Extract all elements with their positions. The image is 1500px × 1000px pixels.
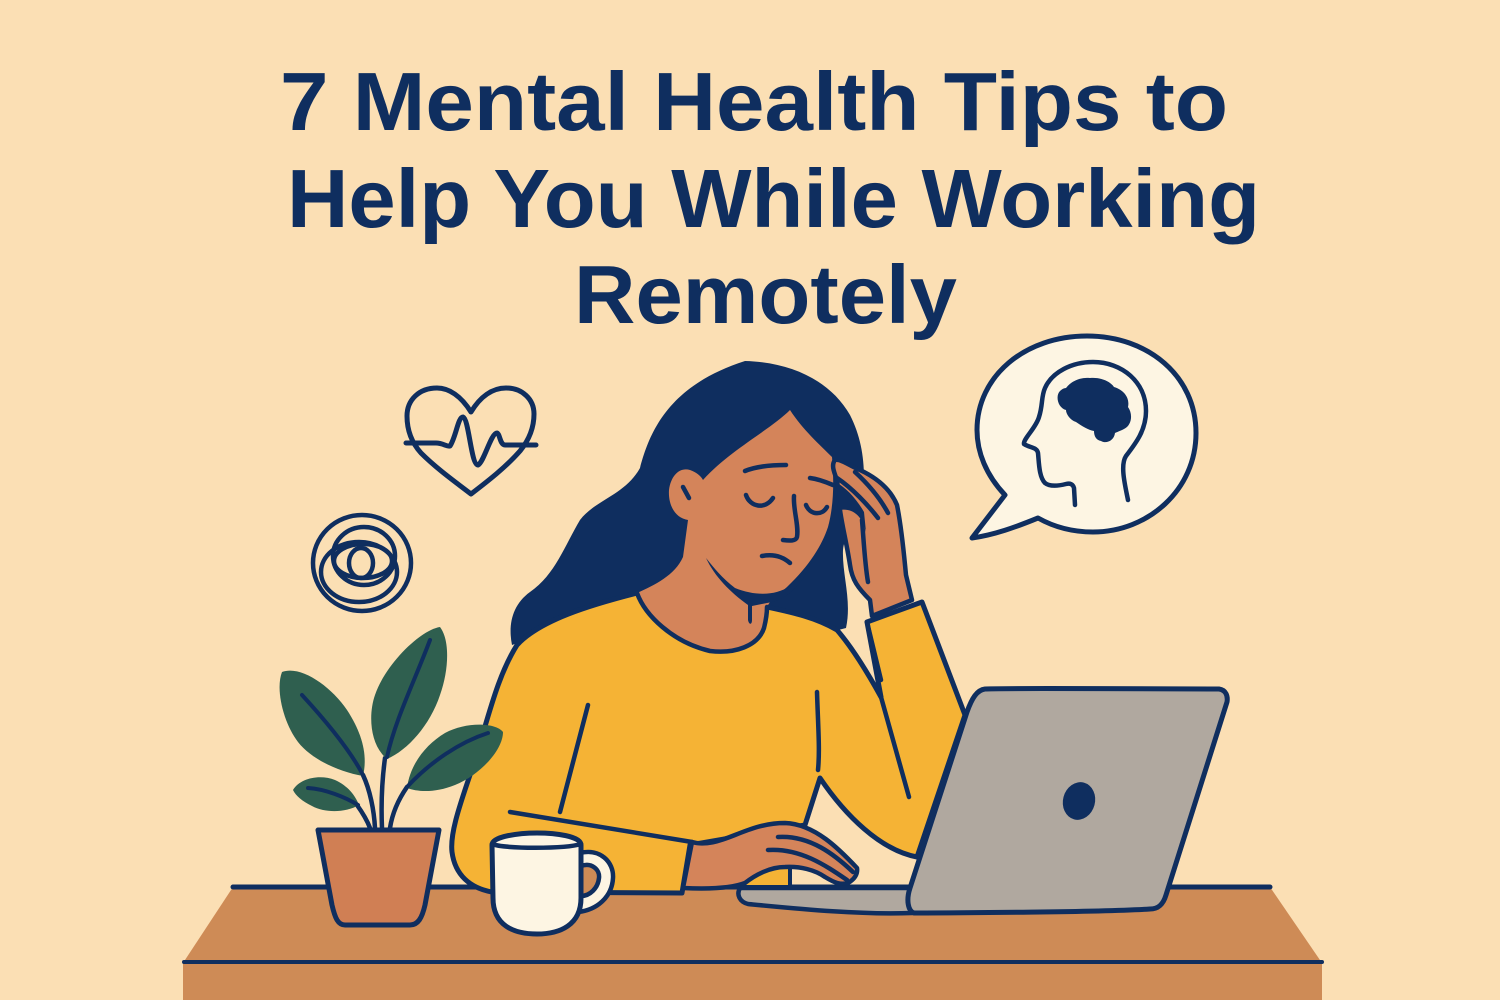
leaves: [280, 671, 365, 776]
laptop screen: [908, 689, 1227, 913]
leaf veins: [302, 640, 488, 805]
collar: [637, 593, 767, 652]
laptop base: [738, 888, 912, 913]
face details: [683, 465, 833, 563]
speech bubble: [972, 336, 1196, 538]
title: [280, 55, 1260, 341]
mug body: [492, 833, 581, 934]
sweater: [452, 593, 965, 893]
shadow between fingers and thumb: [836, 482, 866, 532]
chin shadow: [706, 558, 812, 624]
title: Remotely: [574, 248, 957, 341]
icon: laptop: [738, 689, 1227, 913]
brain: [1058, 378, 1131, 442]
pot: [318, 830, 439, 925]
icon: speech bubble with brain: [972, 336, 1196, 538]
neck and face: [637, 410, 833, 652]
yellow under palm: [735, 868, 790, 886]
icon: heart with pulse: [406, 388, 536, 494]
hair: [511, 361, 864, 645]
stems: [357, 758, 407, 828]
hand on head: [833, 460, 912, 616]
title: Help You While Working: [287, 152, 1260, 245]
desk: [183, 887, 1322, 1000]
head profile: [1024, 362, 1146, 505]
mug handle: [578, 852, 613, 912]
sleeve creases: [510, 622, 909, 842]
icon: coffee mug: [492, 833, 613, 934]
finger lines: [837, 472, 888, 582]
hand on laptop: [683, 823, 857, 888]
person: [452, 361, 965, 893]
icon: potted plant: [280, 627, 503, 925]
laptop logo: [1059, 779, 1099, 823]
title: 7 Mental Health Tips to: [280, 55, 1228, 148]
icon: stress scribble: [313, 515, 411, 611]
